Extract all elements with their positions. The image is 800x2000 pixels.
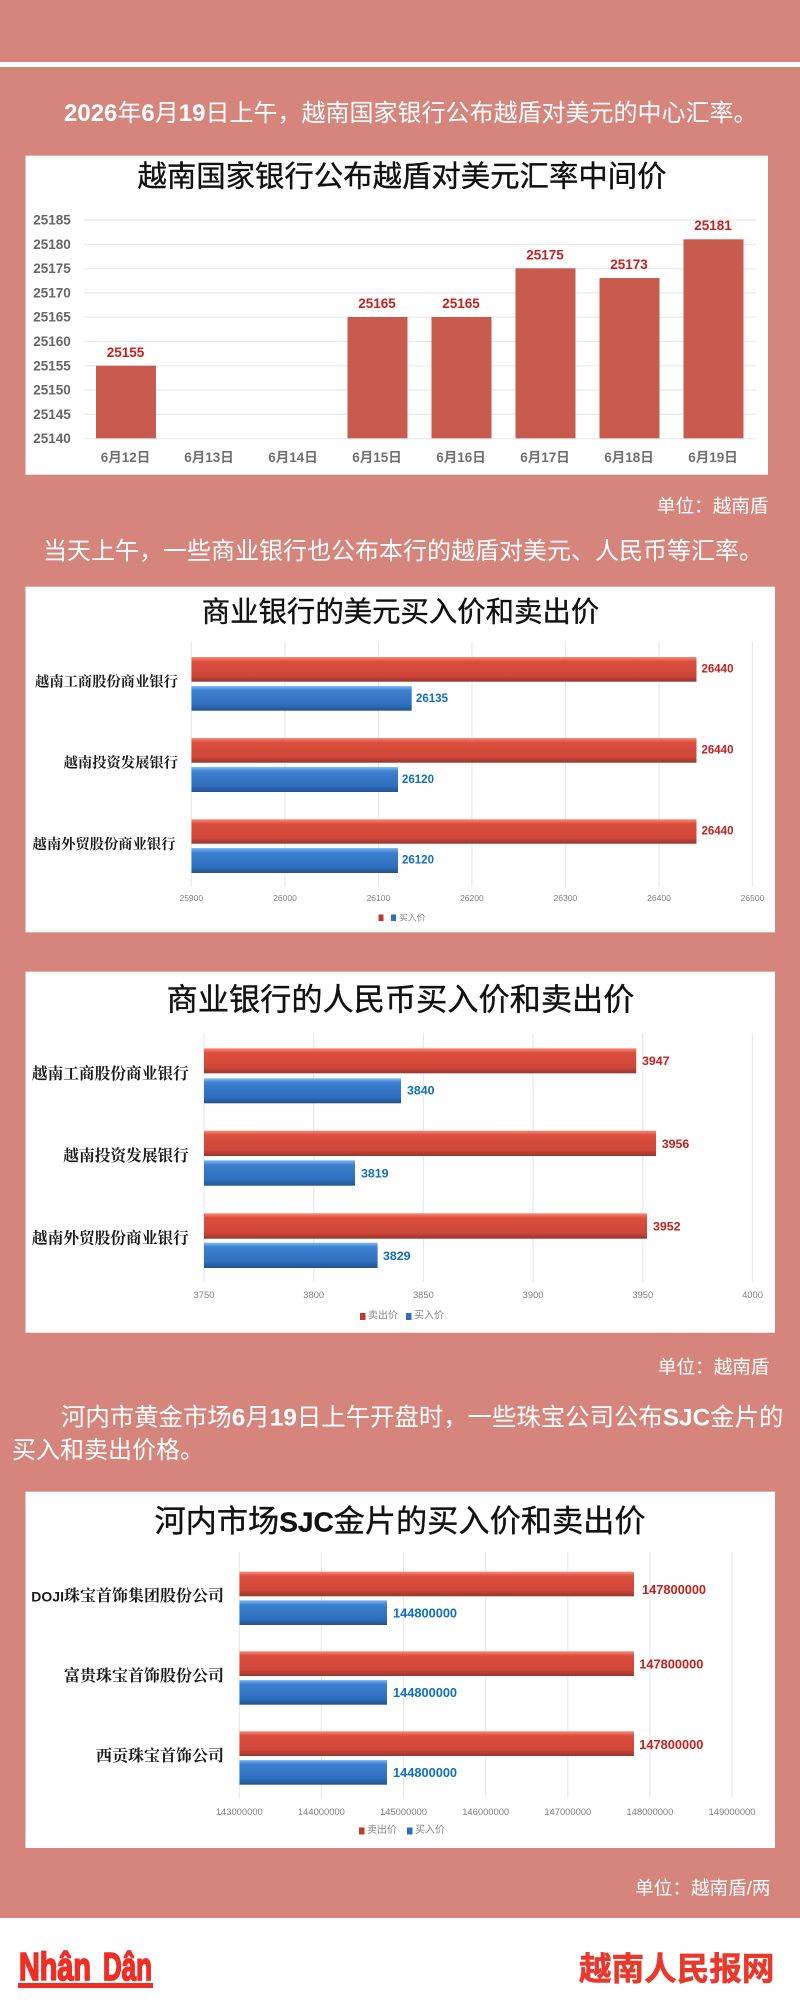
panel: central rate column chart — [26, 156, 768, 475]
column value labels — [107, 218, 732, 360]
intro text: gold market: 买入和卖出价格。 — [12, 1437, 204, 1464]
bank labels: 越南工商股份商业银行 — [35, 673, 178, 691]
y axis grid and labels: 25160 — [33, 334, 71, 349]
bar value labels: 26120 — [402, 774, 434, 786]
x axis labels: 25900 — [179, 893, 203, 903]
x axis labels: 26400 — [647, 893, 671, 903]
chart title: 越南国家银行公布越盾对美元汇率中间价 — [137, 160, 667, 194]
legend: 卖出价 — [368, 1308, 398, 1322]
bar value labels: 147800000 — [639, 1737, 703, 1752]
bars — [204, 1048, 656, 1268]
bar value labels — [361, 1054, 689, 1263]
bar value labels: 3947 — [642, 1054, 670, 1068]
x axis labels: 26200 — [460, 893, 484, 903]
company labels — [31, 1586, 224, 1765]
site name: 越南人民报网 — [579, 1950, 774, 1987]
x axis labels — [179, 893, 765, 903]
x axis labels: 26000 — [273, 893, 297, 903]
company labels: 西贡珠宝首饰公司 — [96, 1746, 224, 1765]
x axis labels: 26500 — [741, 893, 765, 903]
legend: 买入价 — [414, 1310, 444, 1322]
x axis labels: 143000000 — [216, 1806, 263, 1817]
panel: USD bank rates bar chart — [26, 587, 775, 932]
intro text: commercial banks: 当天上午，一些商业银行也公布本行的越盾对美元、人民币等汇率。 — [43, 538, 763, 565]
unit note 2: 单位：越南盾 — [658, 1356, 770, 1378]
bank labels: 越南投资发展银行 — [63, 1146, 189, 1165]
bar value labels: 26440 — [702, 826, 733, 838]
x axis labels — [194, 1289, 763, 1300]
legend — [378, 913, 426, 923]
column value labels: 25175 — [526, 248, 564, 262]
column value labels: 25155 — [107, 345, 145, 360]
bar value labels: 26120 — [402, 854, 434, 866]
x axis date labels: 6月17日 — [520, 450, 570, 465]
intro text: gold market: 河内市黄金市场6月19日上午开盘时，一些珠宝公司公布SJC金片的 — [61, 1404, 783, 1432]
y axis grid and labels: 25145 — [33, 407, 71, 422]
bar value labels: 3952 — [653, 1220, 681, 1234]
bank labels: 越南工商股份商业银行 — [32, 1064, 189, 1083]
x axis labels: 145000000 — [380, 1806, 427, 1817]
x axis labels: 149000000 — [709, 1806, 755, 1817]
y axis grid and labels — [33, 212, 756, 446]
bars — [240, 1572, 634, 1785]
y axis grid and labels: 25155 — [33, 358, 71, 373]
y axis grid and labels: 25175 — [33, 261, 71, 276]
bank labels: 越南外贸股份商业银行 — [33, 835, 176, 853]
y axis grid and labels: 25185 — [33, 212, 71, 228]
panel: SJC gold price bar chart — [26, 1492, 775, 1848]
x axis date labels: 6月13日 — [184, 450, 234, 465]
x axis labels: 3750 — [194, 1289, 214, 1300]
grid lines — [239, 1552, 732, 1798]
bar value labels: 147800000 — [642, 1582, 706, 1597]
bar value labels: 3819 — [361, 1166, 389, 1180]
x axis labels: 3800 — [303, 1289, 324, 1300]
column value labels: 25181 — [694, 218, 732, 233]
legend: 买入价 — [399, 913, 426, 923]
y axis grid and labels: 25170 — [33, 285, 71, 300]
bar value labels: 3956 — [662, 1137, 689, 1151]
y axis grid and labels: 25150 — [33, 383, 71, 398]
x axis date labels: 6月19日 — [688, 450, 738, 465]
x axis date labels: 6月15日 — [352, 450, 402, 465]
company labels: 富贵珠宝首饰股份公司 — [64, 1666, 224, 1685]
chart title: 商业银行的人民币买入价和卖出价 — [167, 982, 634, 1018]
bar value labels: 26135 — [416, 693, 449, 705]
intro text: gold market — [12, 1404, 783, 1464]
bar value labels: 144800000 — [393, 1685, 457, 1700]
white divider band — [0, 62, 800, 67]
grid lines — [204, 1033, 752, 1282]
legend: 卖出价 — [367, 1823, 397, 1836]
bar value labels: 144800000 — [393, 1606, 457, 1620]
y axis grid and labels: 25140 — [33, 431, 71, 446]
bar value labels: 3840 — [407, 1084, 435, 1098]
bank labels — [32, 1064, 189, 1248]
x axis labels: 148000000 — [626, 1806, 673, 1817]
chart title: 商业银行的美元买入价和卖出价 — [202, 596, 599, 628]
x axis labels: 3850 — [413, 1289, 434, 1300]
columns — [96, 239, 744, 438]
company labels: DOJI珠宝首饰集团股份公司 — [31, 1586, 224, 1605]
x axis labels: 26100 — [367, 893, 390, 903]
x axis date labels — [101, 450, 738, 465]
intro text: central rate: 2026年6月19日上午，越南国家银行公布越盾对美元的中心汇率。 — [64, 100, 757, 127]
panel: RMB bank rates bar chart — [26, 972, 775, 1333]
x axis date labels: 6月18日 — [604, 450, 654, 465]
x axis labels: 3950 — [632, 1289, 653, 1300]
legend: 买入价 — [415, 1824, 445, 1836]
unit note 1: 单位：越南盾 — [657, 496, 768, 516]
bank labels: 越南投资发展银行 — [64, 754, 178, 772]
x axis labels — [216, 1806, 755, 1817]
x axis labels: 144000000 — [298, 1806, 345, 1817]
x axis labels: 26300 — [554, 893, 577, 903]
column value labels: 25173 — [610, 257, 648, 272]
legend — [360, 1308, 444, 1322]
logo: Nhan Dan: Nhân — [19, 1946, 91, 1989]
bank labels: 越南外贸股份商业银行 — [32, 1228, 189, 1248]
bar value labels: 147800000 — [639, 1656, 703, 1672]
x axis labels: 3900 — [523, 1289, 544, 1300]
logo: Nhan Dan: Dân — [103, 1946, 152, 1989]
bars — [192, 657, 696, 873]
x axis date labels: 6月14日 — [268, 450, 318, 465]
column value labels: 25165 — [442, 296, 480, 311]
x axis labels: 147000000 — [544, 1806, 591, 1817]
y axis grid and labels: 25165 — [33, 310, 71, 325]
bar value labels: 26440 — [702, 664, 733, 676]
chart title: 河内市场SJC金片的买入价和卖出价 — [154, 1504, 646, 1539]
bank labels — [33, 673, 178, 853]
legend — [359, 1823, 445, 1836]
x axis date labels: 6月16日 — [436, 450, 486, 465]
column value labels: 25165 — [358, 296, 396, 311]
y axis grid and labels: 25180 — [33, 237, 71, 252]
x axis labels: 4000 — [742, 1289, 763, 1300]
unit note 3: 单位：越南盾/两 — [635, 1878, 770, 1898]
bar value labels — [393, 1582, 706, 1780]
x axis labels: 146000000 — [462, 1806, 509, 1817]
x axis date labels: 6月12日 — [101, 450, 150, 465]
bar value labels: 144800000 — [393, 1765, 457, 1780]
bar value labels: 26440 — [702, 745, 733, 757]
grid lines — [191, 642, 753, 887]
bar value labels — [402, 664, 733, 866]
bar value labels: 3829 — [383, 1249, 411, 1263]
